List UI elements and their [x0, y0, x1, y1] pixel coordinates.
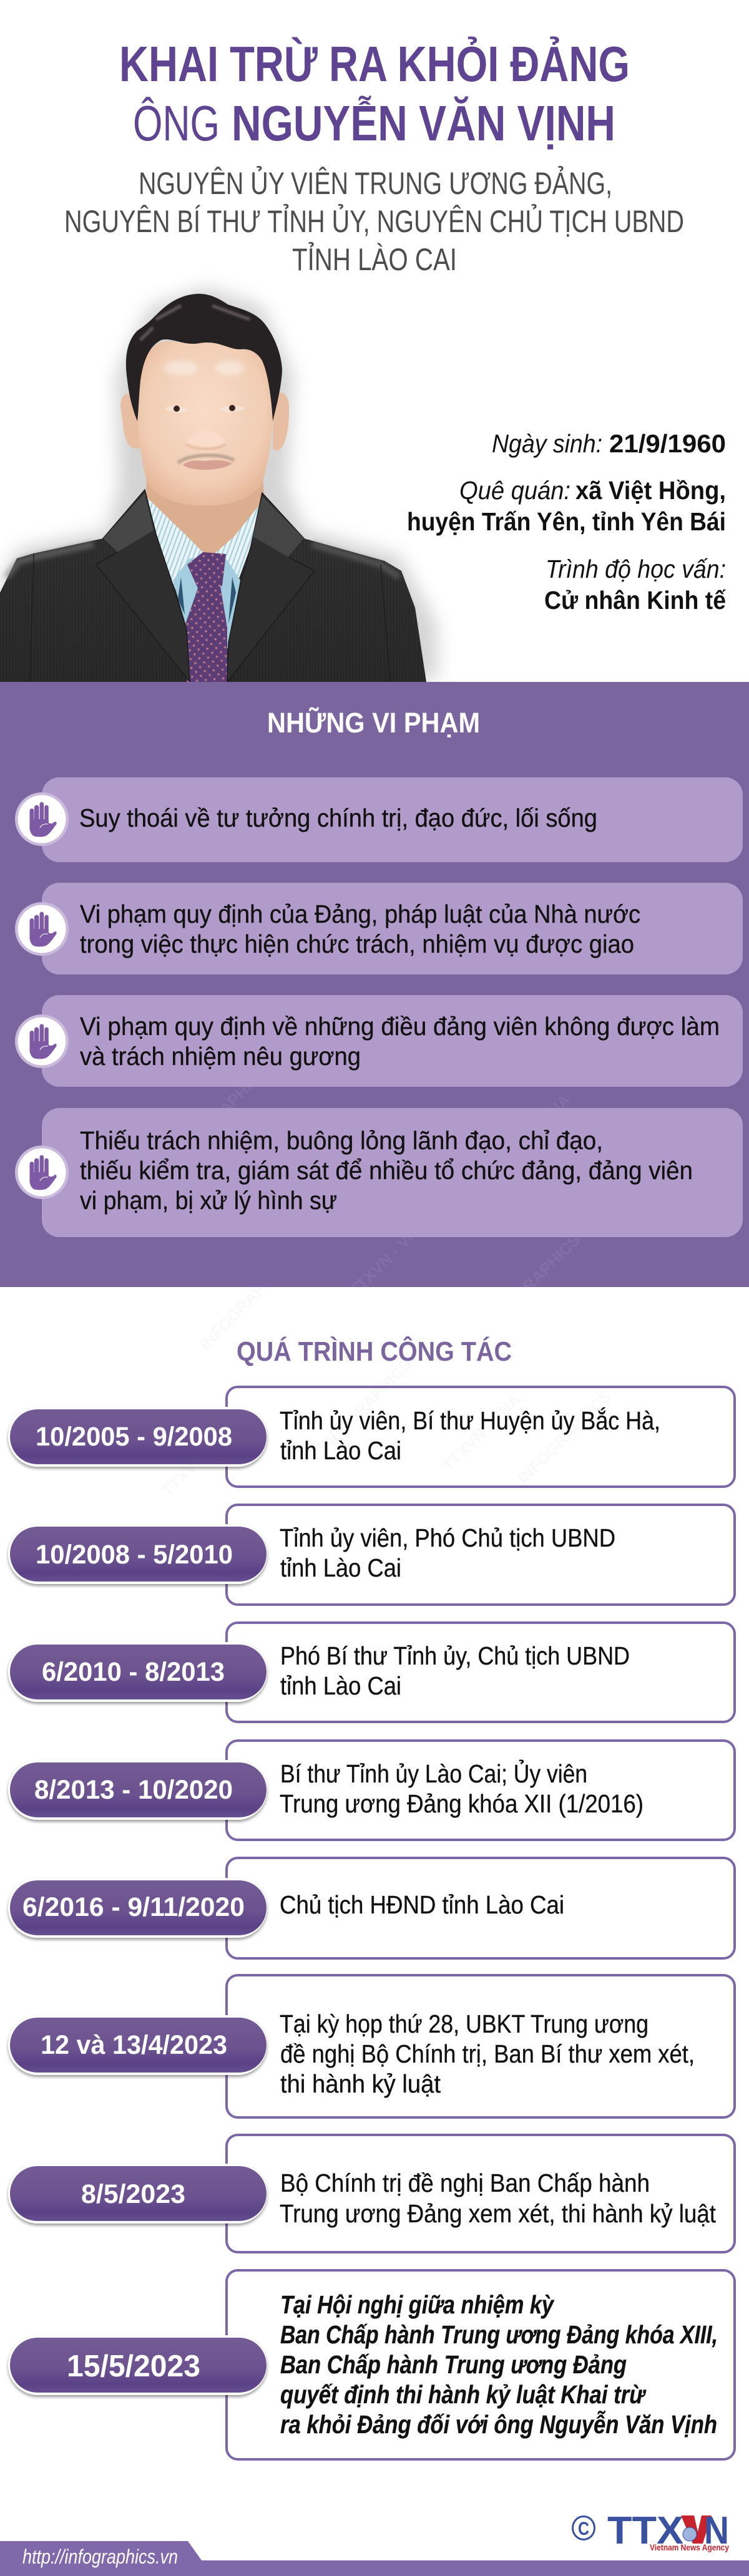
date pill 8: 15/5/2023 — [67, 2350, 200, 2383]
career text 6: thi hành kỷ luật — [280, 2069, 441, 2098]
career text 5: Chủ tịch HĐND tỉnh Lào Cai — [280, 1890, 564, 1919]
violation text 2: trong việc thực hiện chức trách, nhiệm vụ được giao — [80, 930, 634, 958]
birth date: 21/9/1960 — [609, 429, 726, 458]
panel: violations: INFOGRAPHICS — [364, 1112, 465, 1213]
title: NGUYỄN VĂN VỊNH — [232, 95, 615, 151]
date pill 1: 10/2005 - 9/2008 — [36, 1422, 232, 1452]
title — [119, 36, 630, 151]
violation card 4 — [15, 1108, 743, 1237]
violation text 2: Vi phạm quy định của Đảng, pháp luật của Nhà nước — [80, 900, 640, 928]
title: KHAI TRỪ RA KHỎI ĐẢNG — [119, 36, 630, 92]
violation text 3: và trách nhiệm nêu gương — [80, 1042, 361, 1071]
date pill 5 — [8, 1878, 267, 1938]
date pill 8 — [8, 2335, 267, 2395]
date pill 5: 6/2016 - 9/11/2020 — [22, 1892, 245, 1922]
info: personal details — [407, 429, 726, 615]
timeline row 8 — [8, 2270, 735, 2459]
career text 2: tỉnh Lào Cai — [280, 1553, 401, 1582]
panel: violations: INFOGRAPHICS — [482, 1230, 584, 1331]
title: ÔNG — [133, 95, 220, 151]
career text 2 — [280, 1524, 615, 1582]
logo: TTXVN copyright: N — [704, 2509, 729, 2552]
career text 1: Tỉnh ủy viên, Bí thư Huyện ủy Bắc Hà, — [280, 1406, 660, 1435]
career text 8: Ban Chấp hành Trung ương Đảng — [280, 2350, 627, 2379]
hometown: Quê quán: — [459, 476, 570, 505]
violation card 3 — [15, 995, 743, 1087]
icon: stop hand 3 — [15, 1014, 69, 1068]
timeline row 7 — [8, 2135, 735, 2252]
career text 7 — [280, 2169, 717, 2228]
violation card 1 — [15, 777, 743, 862]
subtitle — [64, 165, 684, 277]
violation text 3 — [80, 1012, 720, 1071]
timeline row 1 — [8, 1387, 735, 1487]
career text 1: tỉnh Lào Cai — [280, 1436, 401, 1465]
date pill 6: 12 và 13/4/2023 — [41, 2030, 227, 2060]
icon: stop hand 4 — [15, 1145, 69, 1199]
career text 3: tỉnh Lào Cai — [280, 1671, 401, 1700]
timeline row 3 — [8, 1623, 735, 1722]
heading: career: QUÁ TRÌNH CÔNG TÁC — [237, 1335, 512, 1367]
subtitle: NGUYÊN ỦY VIÊN TRUNG ƯƠNG ĐẢNG, — [139, 165, 612, 201]
career text 3 — [280, 1641, 630, 1700]
date pill 7: 8/5/2023 — [81, 2179, 185, 2209]
violation text 3: Vi phạm quy định về những điều đảng viên không được làm — [80, 1012, 720, 1041]
date pill 2: 10/2008 - 5/2010 — [36, 1540, 233, 1570]
panel: violations: INFOGRAPHICS — [170, 1062, 272, 1163]
timeline row 6 — [8, 1975, 735, 2117]
violation text 4: Thiếu trách nhiệm, buông lỏng lãnh đạo, chỉ đạo, — [80, 1126, 603, 1155]
education: Cử nhân Kinh tế — [544, 586, 726, 615]
career text 8: Tại Hội nghị giữa nhiệm kỳ — [280, 2290, 555, 2319]
timeline row 4 — [8, 1741, 735, 1840]
violation text 4: thiếu kiểm tra, giám sát để nhiều tổ chức đảng, đảng viên — [80, 1156, 693, 1185]
date pill 6 — [8, 2015, 267, 2075]
career text 6 — [280, 2010, 695, 2098]
hometown: xã Việt Hồng, — [575, 476, 726, 505]
birth date: Ngày sinh: — [492, 429, 602, 458]
logo: TTXVN copyright: Vietnam News Agency — [650, 2542, 729, 2552]
career text 6: đề nghị Bộ Chính trị, Ban Bí thư xem xét, — [280, 2039, 695, 2068]
career text 1 — [280, 1406, 660, 1465]
date pill 4: 8/2013 - 10/2020 — [34, 1775, 233, 1805]
text: INFOGRAPHICS — [314, 1355, 415, 1456]
date pill 4 — [8, 1760, 267, 1820]
date pill 2 — [8, 1524, 267, 1584]
icon: stop hand 2 — [15, 902, 69, 956]
date pill 7 — [8, 2164, 267, 2224]
logo: TTXVN copyright — [573, 2509, 729, 2552]
timeline row 5 — [8, 1858, 735, 1958]
career text 2: Tỉnh ủy viên, Phó Chủ tịch UBND — [280, 1524, 615, 1552]
date pill 3: 6/2010 - 8/2013 — [42, 1657, 225, 1687]
education — [544, 555, 726, 615]
logo: TTXVN copyright: TTX — [607, 2509, 683, 2552]
panel: violations: TTXVN - VNA — [345, 1215, 431, 1300]
heading: violations: NHỮNG VI PHẠM — [267, 707, 480, 739]
birth date — [492, 429, 726, 458]
text: INFOGRAPHICS — [514, 1386, 615, 1487]
career text 8: quyết định thi hành kỷ luật Khai trừ — [280, 2380, 647, 2409]
violation text 1: Suy thoái về tư tưởng chính trị, đạo đức, lối sống — [79, 804, 597, 832]
timeline row 2 — [8, 1505, 735, 1605]
education: Trình độ học vấn: — [546, 555, 726, 583]
violation text 4 — [80, 1126, 693, 1215]
violation text 2 — [80, 900, 640, 958]
career text 4: Bí thư Tỉnh ủy Lào Cai; Ủy viên — [280, 1759, 587, 1788]
logo: TTXVN copyright: C — [578, 2519, 589, 2539]
violation text 4: vi phạm, bị xử lý hình sự — [80, 1186, 337, 1215]
violation card 2 — [15, 883, 743, 975]
date pill 1 — [8, 1407, 267, 1467]
text: TTXVN - VNA — [158, 1414, 243, 1500]
career text 4 — [280, 1759, 644, 1818]
panel: violations: TTXVN - VNA — [489, 1090, 574, 1175]
footer url: http://infographics.vn — [22, 2545, 178, 2568]
subtitle: TỈNH LÀO CAI — [292, 242, 457, 277]
hometown — [407, 476, 726, 536]
career text 6: Tại kỳ họp thứ 28, UBKT Trung ương — [280, 2010, 649, 2038]
text: INFOGRAPHICS — [195, 1252, 296, 1353]
panel: violations — [0, 682, 749, 1331]
portrait photo — [0, 287, 437, 682]
text: TTXVN - VNA — [439, 1389, 524, 1475]
icon: stop hand 1 — [15, 792, 69, 846]
footer bar — [0, 2541, 749, 2576]
hometown: huyện Trấn Yên, tỉnh Yên Bái — [407, 507, 726, 536]
career text 4: Trung ương Đảng khóa XII (1/2016) — [280, 1789, 644, 1818]
date pill 3 — [8, 1642, 267, 1702]
career text 8 — [280, 2290, 718, 2439]
career text 3: Phó Bí thư Tỉnh ủy, Chủ tịch UBND — [280, 1641, 630, 1670]
career text 7: Bộ Chính trị đề nghị Ban Chấp hành — [280, 2169, 650, 2197]
